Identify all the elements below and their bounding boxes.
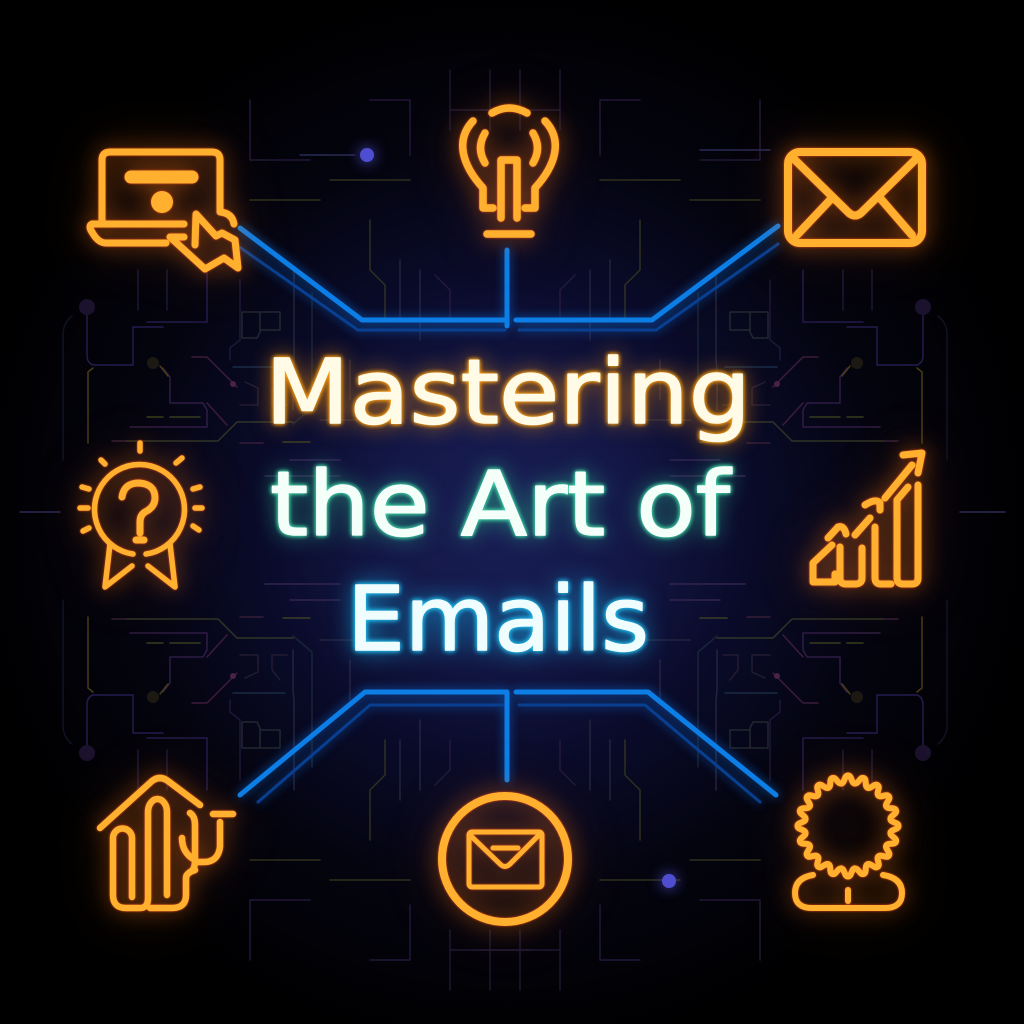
glowing node top xyxy=(360,148,374,162)
icon: envelope in circle xyxy=(442,796,568,922)
icon: house and camel shape xyxy=(100,778,233,908)
title line 3: Emails xyxy=(347,567,649,671)
glowing node bottom xyxy=(662,874,676,888)
title line 2: the Art of xyxy=(270,452,733,556)
icon: light bulb xyxy=(463,108,555,234)
icon: question mark badge xyxy=(80,443,202,587)
icon: sun gear on base xyxy=(795,776,902,908)
blue connector lines bottom xyxy=(240,692,776,802)
blue connector lines top xyxy=(238,226,778,330)
icon: envelope xyxy=(788,152,922,243)
icon: laptop with cursor xyxy=(90,152,238,269)
icon: rising bar chart with arrow xyxy=(813,453,922,584)
title xyxy=(265,340,751,671)
title line 1: Mastering xyxy=(265,340,751,444)
